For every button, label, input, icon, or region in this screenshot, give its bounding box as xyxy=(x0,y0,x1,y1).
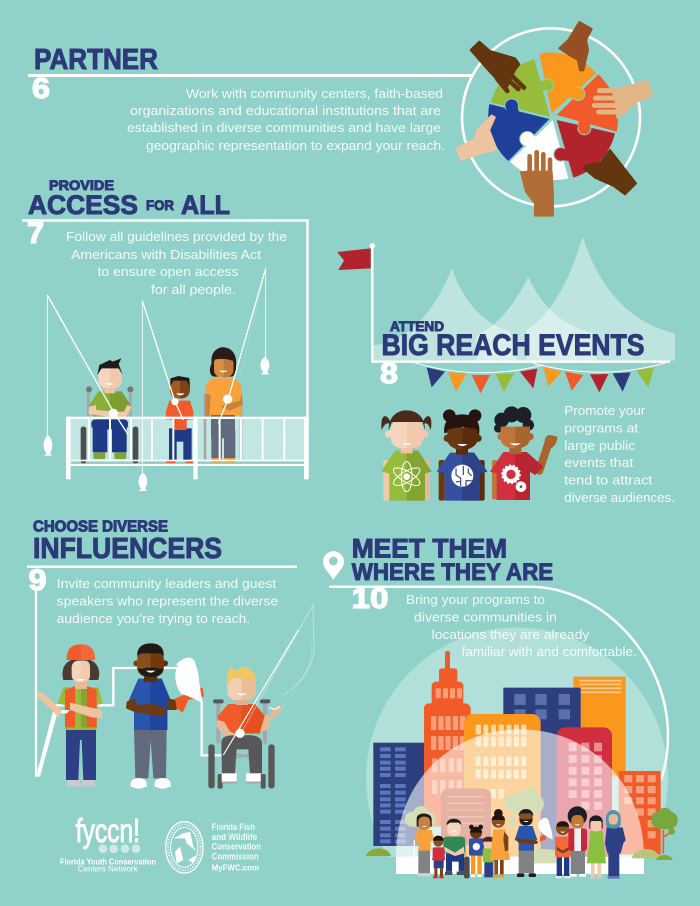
illustration: three influencers xyxy=(36,590,312,789)
text: access description xyxy=(66,229,287,297)
text: access description: for all people. xyxy=(151,282,236,297)
hand: bottom right xyxy=(584,150,636,194)
text: meet them description: familiar with and comfortable. xyxy=(462,644,637,659)
number 6: 6 xyxy=(32,73,50,105)
buildings xyxy=(373,651,661,860)
person: boy in orange shirt xyxy=(555,821,571,878)
number 10: 10 xyxy=(352,583,388,615)
logo: fyccn: fyccn! xyxy=(76,813,140,850)
text: meet them description xyxy=(406,592,637,659)
person: boy in wheelchair xyxy=(81,358,138,463)
tents xyxy=(373,237,675,361)
heading: provide access for all: ALL xyxy=(181,190,230,220)
text: events description: programs at xyxy=(564,420,639,436)
hand: bottom xyxy=(521,172,553,216)
person: small boy in red xyxy=(432,836,445,878)
number 8: 8 xyxy=(380,358,398,390)
person: wheelchair boy in green xyxy=(443,819,470,878)
panel: access for all xyxy=(22,177,309,491)
kid: boy in red xyxy=(490,406,557,500)
person: woman in hijab xyxy=(605,810,626,879)
hand: top xyxy=(559,22,592,70)
heading: attend big reach events xyxy=(382,318,644,362)
text: access description: to ensure open access xyxy=(98,264,239,279)
person: girl with crutches xyxy=(414,813,434,876)
text: partner description: geographic representation to expand your reach. xyxy=(146,138,445,153)
flag xyxy=(337,248,371,270)
text: events description xyxy=(564,403,675,505)
illustration: tents, flag and bunting xyxy=(337,237,675,393)
person: woman with rifle xyxy=(36,644,103,787)
heading: attend big reach events: BIG REACH EVENTS xyxy=(382,329,644,362)
text: events description: diverse audiences. xyxy=(564,490,675,505)
person: girl in blue shirt xyxy=(469,825,484,877)
railing xyxy=(66,417,309,479)
text: partner description: organizations and educational institutions that are xyxy=(130,103,441,118)
text: meet them description: locations they are already xyxy=(432,627,590,642)
logo: florida fish and wildlife: Commission xyxy=(212,851,259,861)
heading: provide access for all: FOR xyxy=(146,197,174,213)
hand: top left xyxy=(471,42,519,89)
text: events description: tend to attract xyxy=(564,472,653,488)
text: influencers description: audience you’re trying to reach. xyxy=(57,611,250,626)
logo: fyccn: Centers Network xyxy=(78,864,138,874)
text: access description: Americans with Disabilities Act xyxy=(71,247,261,262)
heading: choose diverse influencers: INFLUENCERS xyxy=(33,533,222,565)
person: girl with crutches xyxy=(205,347,243,463)
icon: puzzle circle with hands xyxy=(457,22,652,216)
text: events description: events that xyxy=(564,455,634,470)
heading: partner: PARTNER xyxy=(34,44,158,76)
person: man in red jacket xyxy=(568,806,587,877)
number 7: 7 xyxy=(27,217,44,250)
person: boy in wheelchair with rod xyxy=(208,630,312,789)
trees and bushes xyxy=(366,787,678,863)
heading: provide access for all: PROVIDE xyxy=(49,177,114,193)
logo: fyccn: Florida Youth Conservation xyxy=(60,856,156,866)
logo: florida fish and wildlife: Conservation xyxy=(212,841,261,851)
text: influencers description: Invite community leaders and guest xyxy=(57,576,277,591)
text: meet them description: diverse communities in xyxy=(414,610,557,625)
ground and light dome xyxy=(396,729,644,874)
person: woman in orange dress xyxy=(490,809,510,878)
illustration: three kids xyxy=(381,406,557,501)
kid: girl in green xyxy=(381,410,432,501)
text: partner description: established in diverse communities and have large xyxy=(127,120,441,135)
badge icons xyxy=(99,844,140,853)
text: meet them description: Bring your programs to xyxy=(406,592,545,607)
hand: right xyxy=(615,81,652,118)
person: man with falcon xyxy=(515,809,553,877)
bunting xyxy=(427,367,654,393)
heading: provide access for all: ACCESS xyxy=(28,190,138,220)
heading: choose diverse influencers xyxy=(33,518,222,565)
heading: meet them where they are: MEET THEM xyxy=(352,534,507,564)
text: access description: Follow all guidelines provided by the xyxy=(66,229,287,244)
heading: choose diverse influencers: CHOOSE DIVERSE xyxy=(33,518,168,536)
text: partner description: Work with community centers, faith-based xyxy=(186,86,443,101)
kid: girl in blue xyxy=(437,409,487,501)
hand: left xyxy=(457,115,497,160)
text: influencers description: speakers who represent the diverse xyxy=(57,594,278,608)
heading: provide access for all xyxy=(28,177,230,220)
text: events description: Promote your xyxy=(564,403,646,418)
person: man with falcon xyxy=(126,643,204,789)
number 9: 9 xyxy=(28,564,46,597)
text: events description: large public xyxy=(564,438,636,453)
person: small kid in green xyxy=(483,837,495,877)
pale circle backdrop xyxy=(366,628,668,857)
heading: attend big reach events: ATTEND xyxy=(390,318,444,334)
person: woman in green dress xyxy=(587,815,606,879)
logo: florida fish and wildlife: MyFWC.com xyxy=(212,863,259,873)
seal xyxy=(166,822,203,873)
person: boy with rod xyxy=(166,376,194,463)
heading: meet them where they are xyxy=(352,534,553,586)
small building xyxy=(441,788,491,845)
panel: big reach events xyxy=(337,237,675,505)
logo: florida fish and wildlife: Florida Fish xyxy=(212,822,255,832)
icon: map pin xyxy=(323,551,344,580)
text: influencers description xyxy=(57,576,278,626)
panel: meet them where they are xyxy=(323,534,678,879)
logo: fyccn xyxy=(60,813,156,874)
panel: partner xyxy=(28,22,652,216)
text: partner description xyxy=(127,86,445,153)
crowd of people xyxy=(414,806,626,879)
logo: florida fish and wildlife xyxy=(166,822,261,873)
panel: choose diverse influencers xyxy=(27,518,314,789)
icon: fishing rods and fish xyxy=(44,268,270,491)
illustration: fishing pier xyxy=(44,268,309,491)
heading: meet them where they are: WHERE THEY ARE xyxy=(352,559,553,586)
logo: florida fish and wildlife: and Wildlife xyxy=(212,832,257,842)
illustration: city and crowd xyxy=(366,651,678,879)
